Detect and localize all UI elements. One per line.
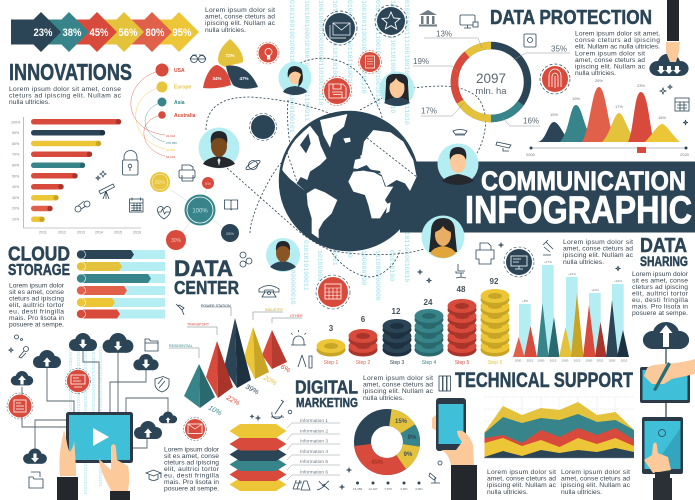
binary code background: centre columns: 100100110001010110010110	[360, 0, 367, 94]
binary code background: centre columns: 11001100011011010001010010110	[389, 0, 396, 113]
binary code background: centre columns: 01010100	[388, 250, 395, 281]
icon: calendar circle	[316, 275, 350, 309]
triangle bar chart: 2015	[597, 358, 604, 362]
icons: cloud storage small	[9, 335, 169, 488]
information labels: Information 5	[300, 459, 328, 465]
area peaks chart: 26%	[595, 78, 603, 83]
bar chart: innovations: 50%	[12, 174, 20, 178]
text: top paragraph: Lorem ipsum dolor sit	[205, 7, 275, 14]
top percentage arrows: 38%	[62, 27, 82, 39]
text: data protection paragraphs: conse cteturs ad ipiscing	[575, 37, 660, 44]
bubble network: 100%	[192, 208, 208, 214]
triangle bar chart: +17%	[544, 260, 552, 264]
stacked ring steps: 92	[490, 277, 499, 286]
heading: data center	[174, 256, 239, 298]
triangle bar chart: 2015	[621, 358, 628, 362]
legend: regions with curves: Australia	[174, 113, 196, 119]
text: data protection paragraphs: ipiscing elit. Nullam ac	[575, 64, 646, 70]
triangle bar chart: 2015	[550, 358, 557, 362]
donut callouts: 17%	[421, 106, 437, 116]
triangle bar chart: 2015	[574, 358, 581, 362]
triangle bar chart: 2000	[538, 358, 545, 362]
triangle bar chart: +8%	[522, 299, 528, 303]
heading: cloud storage	[8, 244, 70, 279]
text: data protection paragraphs	[575, 30, 660, 77]
bubble network: 30%	[171, 238, 182, 244]
bar chart: innovations	[11, 117, 141, 234]
legend: regions with curves: 54,001	[166, 155, 176, 159]
top percentage arrows: 95%	[172, 27, 192, 39]
heading: data protection: DATA PROTECTION	[490, 7, 652, 29]
icon: lightbulb circle	[257, 42, 279, 64]
left sleeve	[57, 477, 78, 500]
area peaks chart: 17%	[615, 104, 623, 109]
pyramid chart: RESIDENTIAL	[169, 344, 193, 348]
binary code under tablet: 1010010101	[98, 462, 103, 488]
pyramid chart: 10%	[207, 405, 223, 417]
text: cloud storage paragraph: cteturs ad ipiscing	[9, 296, 64, 302]
bubble network: 5%	[205, 181, 211, 186]
text: data protection paragraphs: nulla ultricies.	[575, 70, 616, 77]
text: data sharing top paragraph: ipiscing elit. Nullam ac	[563, 252, 634, 259]
pyramid chart: 22%	[224, 394, 241, 407]
triangle bar chart: +15%	[568, 272, 576, 276]
bar chart: innovations: 2015	[114, 230, 122, 234]
stacked ring steps: Step 4	[422, 360, 436, 366]
text: left bottom paragraph: cteturs ad ipiscing	[164, 460, 219, 466]
heading: data center: DATA	[174, 256, 233, 281]
triangle bar chart: +19%	[614, 279, 622, 283]
text: technical support paragraphs: ipiscing elit. Nullam ac	[487, 482, 557, 489]
binary code under tablet: 1101001010110010100101100101	[91, 347, 96, 417]
bar chart: innovations: 80%	[12, 142, 20, 146]
text: left bottom paragraph: Lorem ipsum dolor	[164, 446, 220, 454]
sleeve cuff	[655, 472, 670, 478]
binary code background: centre columns: 0101100100100010000110011000100101	[288, 0, 295, 133]
text: cloud storage paragraph: elit, aultrici tortor	[9, 302, 65, 309]
text: top paragraph: nulla ultricies.	[205, 27, 246, 34]
bar chart: cloud storage	[76, 250, 165, 318]
text: left bottom paragraph: posuere at sempe.	[164, 486, 219, 492]
icons: innovations tools	[75, 150, 143, 212]
heading: digital marketing: MARKETING	[296, 395, 358, 410]
hexagon layer stack	[230, 424, 286, 491]
dot legend	[353, 482, 423, 491]
legend: regions with curves	[131, 64, 196, 159]
triangle bar chart: 2015	[527, 358, 534, 362]
text: left bottom paragraph: eu, desti fringilla	[164, 472, 219, 480]
bar chart: innovations: 100%	[11, 120, 21, 124]
stacked ring steps: Step 3	[390, 360, 404, 366]
text: data sharing paragraph: cteturs ad ipiscing	[632, 284, 688, 291]
left hand	[59, 430, 76, 476]
binary code under tablet: 1001010110001011010010101001	[76, 347, 81, 417]
text: technical support paragraphs	[487, 469, 631, 496]
area peaks chart: 19%	[572, 96, 580, 101]
bar chart: innovations: 10%	[12, 218, 20, 222]
bar chart: innovations: 2014	[95, 230, 103, 234]
stacked area chart	[484, 397, 634, 458]
text: top paragraph	[205, 7, 276, 34]
avatar: woman top left	[278, 62, 312, 95]
donut chart: 2097 mln. ha: 2097	[476, 71, 506, 86]
right sleeve	[110, 491, 130, 500]
text: digital marketing paragraph: ipiscing elit. Nullam ac	[363, 388, 434, 395]
stacked ring steps: 3	[329, 324, 334, 333]
stacked ring steps: 6	[361, 315, 366, 324]
text: innovations paragraph: Lorem ipsum dolor sit amet, conse	[9, 86, 121, 93]
binary code background: centre columns: 01001000111100100100101010011010	[403, 0, 410, 125]
dashed orbits	[206, 58, 486, 277]
bar chart: innovations: 2012	[58, 230, 66, 234]
text: data protection paragraphs: amet, conse cteturs ad	[575, 57, 645, 64]
donut chart: digital marketing: 15%	[395, 419, 408, 425]
binary code background: centre columns: 00000000000010	[289, 250, 296, 305]
text: data protection paragraphs: Lorem ipsum dolor sit amet,	[575, 30, 660, 38]
text: technical support paragraphs: ipiscing elit. Nullam ac	[561, 482, 631, 489]
triangle bar chart: +11%	[591, 288, 599, 292]
leaf chart: 72%	[225, 53, 235, 58]
text: technical support paragraphs: Lorem ipsum dolor sit	[487, 469, 556, 476]
binary code under tablet	[68, 347, 103, 495]
bar chart: innovations: 90%	[12, 131, 20, 135]
pyramid chart	[169, 304, 303, 417]
top percentage arrows: 56%	[118, 27, 138, 39]
text: left bottom paragraph: sit es amet, conse	[164, 453, 219, 460]
bar chart: innovations: 2016	[133, 230, 141, 234]
heading: data sharing	[640, 235, 688, 269]
legend: regions with curves: USA	[174, 68, 185, 74]
text: cloud storage paragraph: posuere at sempe.	[9, 322, 64, 328]
finger hand	[644, 442, 671, 473]
area peaks chart: 18%	[658, 115, 666, 120]
triangle bar chart: 2000	[586, 358, 593, 362]
avatar: man left	[198, 128, 240, 168]
binary code background: centre columns: 0101010100011	[302, 240, 309, 291]
legend: regions with curves: Europe	[174, 84, 191, 90]
dot legend: 7,979	[384, 487, 392, 491]
lower tablet	[642, 417, 683, 474]
pyramid chart: 6%	[279, 364, 291, 375]
icon: red monitor circle	[66, 368, 90, 394]
legend: regions with curves: 10,010	[166, 148, 176, 152]
heading: cloud storage: STORAGE	[8, 262, 70, 279]
area peaks chart: 15%	[550, 112, 558, 117]
legend: regions with curves: 31,010	[166, 134, 176, 138]
binary code under tablet: 0110101001010011010100101011	[98, 347, 103, 417]
icons: data center small	[176, 252, 442, 490]
heading: data center: CENTER	[174, 278, 239, 298]
top percentage arrows	[11, 12, 199, 52]
donut chart: digital marketing	[362, 418, 417, 467]
donut callouts	[413, 30, 570, 126]
stacked ring steps: 48	[457, 285, 466, 294]
bar chart: innovations: 70%	[12, 152, 20, 156]
text: cloud storage paragraph: mais. Pro lisota in	[9, 315, 64, 322]
text: data sharing top paragraph: nulla ultricies.	[563, 259, 604, 266]
bar chart: innovations: 30%	[12, 196, 20, 200]
dot legend: 3,951	[400, 487, 408, 491]
text: top paragraph: ipiscing elit. Nullam ac	[205, 20, 276, 27]
binary code background: centre columns: 00	[346, 250, 353, 258]
icon: bank	[419, 10, 437, 26]
icon: red envelope circle	[184, 418, 206, 440]
donut chart: digital marketing: 45%	[371, 460, 384, 466]
leaf chart	[203, 39, 258, 89]
bar chart: innovations: 20%	[12, 206, 20, 210]
information labels	[287, 418, 340, 480]
top percentage arrows: 45%	[90, 27, 109, 39]
donut chart: 2097 mln. ha	[454, 46, 528, 119]
stacked ring steps: Step 6	[488, 360, 502, 366]
text: innovations paragraph	[9, 86, 122, 106]
icon: hand pressing cloud	[649, 0, 689, 76]
heading: innovations: INNOVATIONS	[9, 59, 132, 85]
heading: cloud storage: CLOUD	[8, 244, 70, 266]
text: technical support paragraphs: Lorem ipsum dolor sit	[561, 469, 630, 476]
text: cloud storage paragraph: sit es amet, conse	[9, 289, 64, 296]
icons: glasses, printer, heart, book, planet	[157, 55, 261, 219]
heading: data sharing: DATA	[640, 235, 687, 257]
text: data sharing paragraph: sit es amet, conse	[632, 278, 688, 284]
text: technical support paragraphs: amet, conse cteturs ad	[487, 476, 556, 482]
donut chart: digital marketing: 9%	[408, 435, 417, 441]
text: left bottom paragraph	[164, 446, 220, 492]
icon: cloud with tablets and hands	[640, 322, 695, 500]
avatar: man bottom	[266, 238, 300, 272]
sleeve	[653, 478, 672, 500]
text: left bottom paragraph: mais. Pro lisota in	[164, 479, 219, 486]
bar chart: innovations: 60%	[12, 164, 20, 168]
triangle bar chart	[513, 260, 629, 362]
leaf chart: 34%	[212, 76, 222, 81]
area peaks chart: 2020	[680, 152, 690, 157]
stacked ring steps: Step 2	[356, 360, 370, 366]
text: cloud storage paragraph: eu, desti fringilla	[9, 308, 64, 316]
binary code background: centre columns: 0100001100101101110010110	[346, 0, 353, 98]
information labels: Information 6	[300, 470, 328, 476]
text: technical support paragraphs: nulla ultricies.	[487, 489, 528, 496]
stacked ring steps	[316, 277, 510, 366]
binary code background: centre columns	[288, 0, 410, 305]
text: top paragraph: amet, conse cteturs ad	[205, 14, 275, 20]
bubble network	[150, 172, 239, 250]
dot legend: 15,258	[353, 487, 362, 491]
area peaks chart: 2000	[526, 152, 536, 157]
text: data sharing paragraph: posuere at sempe.	[632, 310, 688, 317]
donut chart: digital marketing: 9%	[404, 452, 413, 458]
donut callouts: 13%	[436, 30, 452, 38]
area peaks chart: 23%	[637, 83, 645, 88]
icon: floppy disk circle	[322, 76, 352, 106]
pyramid chart: 39%	[244, 384, 260, 396]
pyramid chart: INDUSTRY	[265, 308, 284, 312]
text: data sharing paragraph: Lorem ipsum dolor	[632, 271, 689, 278]
donut chart: 2097 mln. ha: mln. ha	[475, 86, 507, 97]
binary code under tablet: 0101101001010	[83, 462, 88, 495]
icon: red document circle	[7, 393, 33, 419]
text: digital marketing paragraph	[363, 375, 434, 402]
icons: data protection small	[453, 15, 689, 151]
top percentage arrows: 80%	[146, 27, 165, 39]
right hand	[99, 444, 129, 492]
binary code background: centre columns: 100000100	[360, 250, 367, 285]
text: data sharing paragraph	[632, 271, 689, 317]
text: cloud storage paragraph	[9, 282, 65, 328]
heading: digital marketing: DIGITAL	[295, 376, 358, 398]
magnifier	[658, 430, 666, 436]
text: data sharing paragraph: eu, desti fringilla	[632, 297, 688, 304]
icons: printer, monitor, gavel, chair	[418, 240, 620, 283]
upper tablet	[640, 367, 690, 403]
donut callouts: 19%	[413, 57, 429, 66]
phone with hand	[432, 398, 477, 500]
text: data sharing paragraph: mais. Pro lisota in	[632, 304, 688, 310]
top percentage arrows: 23%	[34, 27, 53, 39]
icon: fingerprint circle	[540, 64, 570, 94]
triangle bar chart: 2000	[515, 358, 522, 362]
information labels: Information 1	[300, 418, 328, 424]
text: digital marketing paragraph: Lorem ipsum dolor sit	[363, 375, 433, 382]
binary code background: centre columns: 0101	[331, 250, 338, 266]
binary code under tablet: 0101000110100101001010110110	[68, 347, 73, 417]
binary code background: centre columns: 1001001000101001000101001100011	[303, 0, 310, 121]
icon: envelope circle	[323, 11, 357, 45]
icons: upload and download clouds	[11, 333, 177, 464]
pyramid chart: 20%	[261, 374, 278, 387]
triangle bar chart: 2000	[562, 358, 569, 362]
stacked ring steps: 12	[392, 307, 401, 316]
text: data sharing top paragraph	[563, 239, 634, 266]
icon: navy dot circle	[250, 114, 276, 140]
icon: star circle	[375, 5, 407, 37]
hand with pen	[644, 359, 695, 384]
information labels: Information 3	[300, 438, 328, 444]
bubble network: 80%	[155, 180, 166, 186]
avatar: woman top right	[380, 72, 414, 106]
heading: digital marketing	[295, 376, 358, 410]
area peaks chart	[526, 78, 690, 157]
bar chart: innovations: 2013	[77, 230, 85, 234]
text: technical support paragraphs: nulla ultricies.	[561, 489, 602, 496]
text: left bottom paragraph: elit, aultrici tortor	[164, 466, 220, 473]
pyramid chart: OTHER	[290, 314, 303, 318]
text: data sharing top paragraph: amet, conse cteturs ad	[563, 246, 633, 252]
triangle bar chart: 2000	[609, 358, 616, 362]
bar chart: innovations: 2011	[39, 230, 47, 234]
title banner	[400, 162, 695, 232]
binary code background: centre columns: 00011011010010010	[403, 216, 410, 282]
pyramid chart: POWER STATION	[201, 304, 231, 308]
information labels: Information 2	[300, 428, 328, 434]
binary code under tablet: 0010110101001100101101000110	[83, 347, 88, 416]
dot legend: 3,951	[415, 487, 423, 491]
binary code background: centre columns: 10100000	[316, 250, 323, 281]
pyramid chart: TRANSPORT	[187, 322, 210, 326]
information labels: Information 4	[300, 449, 328, 455]
text: data protection paragraphs: Lorem ipsum dolor sit	[575, 50, 645, 58]
text: data sharing top paragraph: Lorem ipsum dolor sit	[563, 239, 633, 246]
cloud network connectors	[22, 350, 168, 449]
legend: regions with curves: 276,059	[166, 141, 177, 145]
text: cloud storage paragraph: Lorem ipsum dolor	[9, 282, 65, 290]
avatar: woman right	[422, 216, 464, 258]
text: data protection paragraphs: elit. Nullam ac nulla ultricies.	[575, 44, 660, 50]
heading: technical support: TECHNICAL SUPPORT	[455, 369, 633, 392]
binary code background: centre columns: 1010100011101011010010110	[331, 0, 338, 98]
icon: document circle	[358, 50, 382, 74]
stacked ring steps: Step 5	[455, 360, 469, 366]
text: innovations paragraph: nulla ultricies.	[9, 99, 50, 106]
text: innovations paragraph: cteturs ad ipiscing elit. Nullam ac	[9, 92, 122, 100]
text: digital marketing paragraph: nulla ultricies.	[363, 395, 404, 402]
globe	[279, 111, 419, 251]
stacked ring steps: 24	[424, 298, 433, 307]
text: digital marketing paragraph: amet, conse cteturs ad	[363, 382, 433, 388]
stacked ring steps: Step 1	[324, 360, 338, 366]
tablet with play button	[57, 412, 133, 500]
leaf chart: 47%	[239, 76, 249, 81]
bubble network: 28%	[226, 231, 234, 236]
text: data sharing paragraph: elit, aultrici tortor	[632, 290, 689, 298]
binary code background: centre columns: 1110000000000	[374, 250, 381, 301]
binary code background: centre columns: 100100001001000011010011010	[317, 0, 324, 105]
icon: binders	[439, 376, 450, 391]
donut callouts: 16%	[523, 116, 539, 126]
binary code background: centre columns: 010101001100100111010010101	[374, 0, 381, 105]
legend: regions with curves: Asia	[174, 100, 185, 106]
text: technical support paragraphs: amet, conse cteturs ad	[561, 476, 630, 482]
avatar: man right	[438, 144, 478, 185]
donut callouts: 35%	[551, 44, 567, 54]
bar chart: innovations: 40%	[12, 185, 20, 189]
dot legend: 12,107	[368, 487, 378, 491]
